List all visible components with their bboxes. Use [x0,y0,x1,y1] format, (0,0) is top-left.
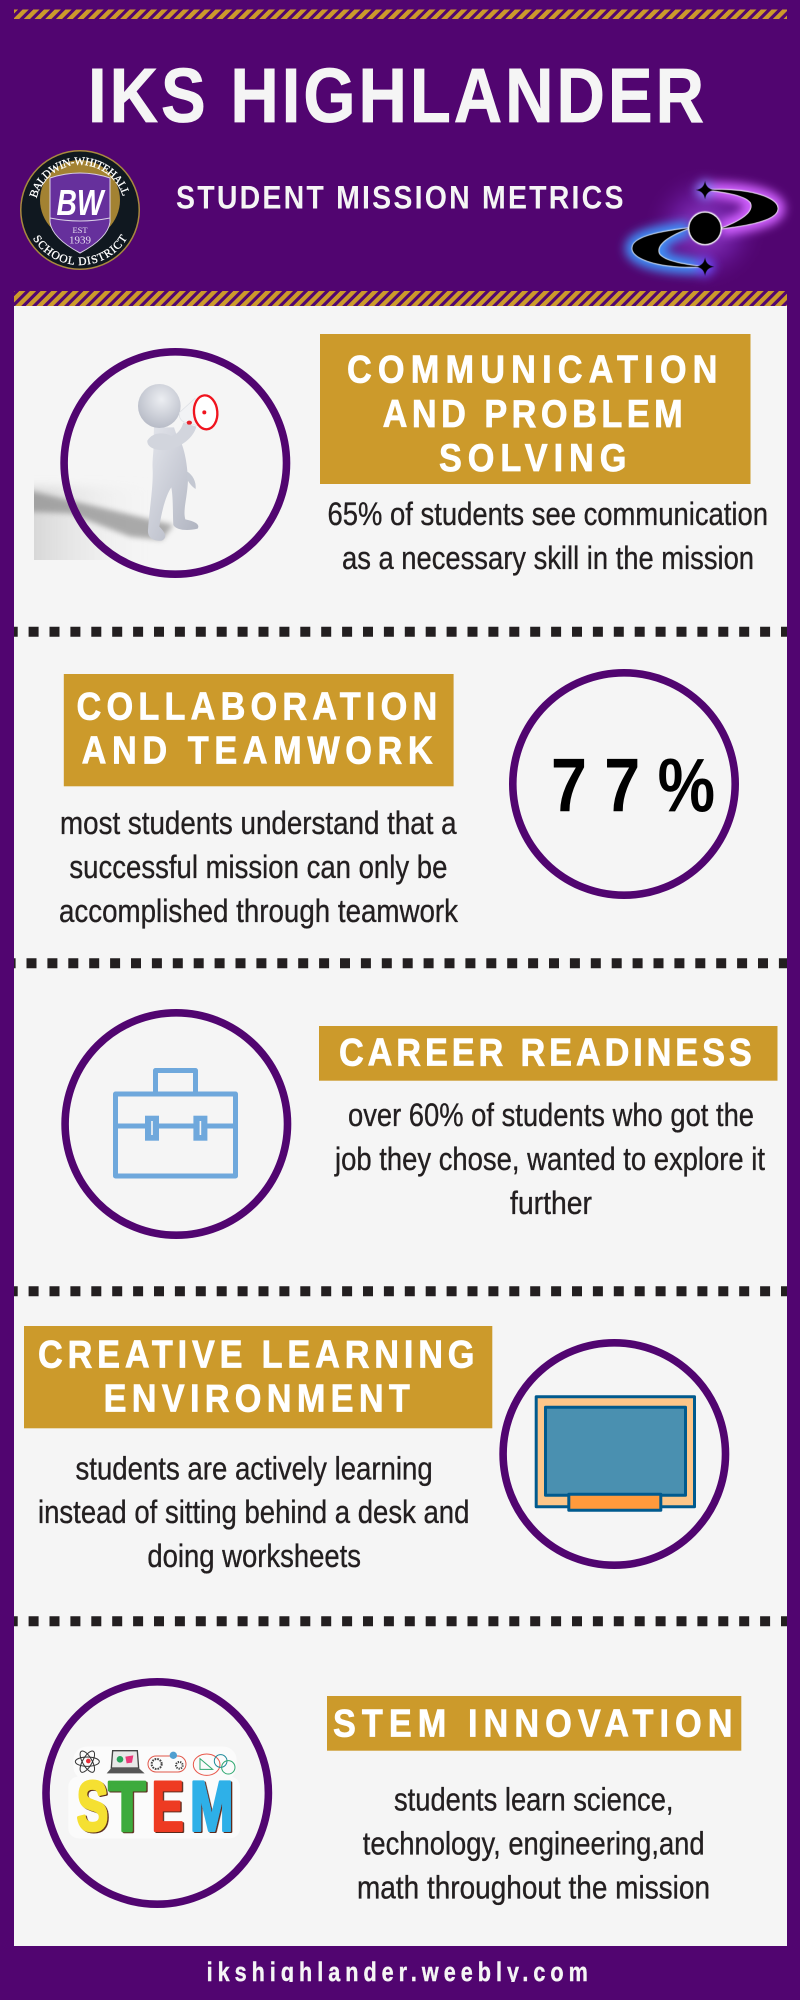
heading [320,334,750,484]
lower stripe [14,291,787,306]
title: IKS HIGHLANDER [88,54,704,139]
body text [357,1782,710,1906]
heading: CREATIVE LEARNING [38,1332,474,1376]
heading: STEM INNOVATION [333,1702,733,1745]
STEM letters: S [77,1767,108,1846]
school district emblem: SCHOOL DISTRICT [33,234,126,266]
circle: 77 percent [513,673,735,895]
icon: chalkboard [536,1397,694,1510]
footer url: ikshighlander.weebly.com [207,1958,588,1988]
STEM letters: T [108,1767,146,1846]
icon: geometry [193,1754,235,1775]
top stripe [14,10,787,19]
circle frame [65,1013,288,1235]
body text: students are actively learning [76,1450,433,1486]
heading [64,674,454,786]
icon: figure with megaphone [34,384,218,560]
content panel [14,306,787,1946]
body text: instead of sitting behind a desk and [38,1494,469,1530]
heading: CAREER READINESS [339,1031,752,1074]
school district emblem: BW [56,182,106,223]
body text [328,496,768,576]
panel: collaboration [59,673,735,929]
school district emblem: 1939 [69,234,92,246]
STEM letters: E [152,1767,184,1846]
circle frame [503,1343,726,1565]
heading: COLLABORATION [76,684,437,728]
heading: AND PROBLEM [383,392,683,435]
heading: COMMUNICATION [347,348,717,391]
school district emblem: EST [72,225,88,235]
school district emblem [20,150,140,270]
heading [24,1326,492,1428]
body text: accomplished through teamwork [59,893,459,929]
subtitle: STUDENT MISSION METRICS [176,180,623,216]
body text: students learn science, [394,1782,674,1818]
header band [14,10,792,306]
circle: 77 percent: 77% [551,743,715,828]
icon: STEM artwork [68,1747,240,1846]
heading: AND TEAMWORK [82,728,433,772]
icon: gears [148,1752,186,1772]
circle frame [64,352,286,574]
panel: stem innovation [46,1682,741,1906]
heading: SOLVING [439,436,626,479]
STEM letters [77,1767,233,1846]
panel: communication [17,334,768,580]
planet logo [632,165,778,292]
body text [38,1450,469,1574]
body text: math throughout the mission [357,1870,710,1906]
body text [59,805,459,929]
school district emblem: BALDWIN-WHITEHALL [29,157,129,198]
panel: creative learning [24,1326,726,1574]
heading: ENVIRONMENT [104,1377,410,1420]
icon: briefcase [116,1070,236,1176]
panel: career readiness [65,1013,778,1235]
STEM letters: M [190,1767,233,1846]
circle frame [46,1682,268,1904]
icon: laptop [107,1751,145,1773]
body text: most students understand that a [60,805,457,841]
body text: technology, engineering,and [363,1826,705,1862]
body text: further [510,1185,592,1221]
body text [334,1097,765,1221]
icon: atom [75,1749,99,1774]
body text: successful mission can only be [69,849,447,885]
body text: doing worksheets [147,1538,361,1574]
